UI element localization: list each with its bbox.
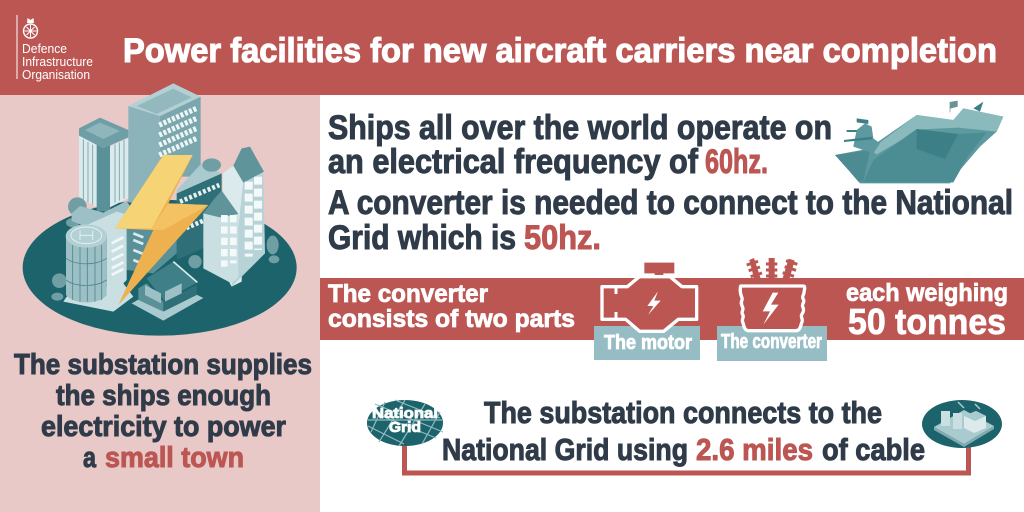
header band [0, 0, 1024, 95]
label box: the motor [594, 326, 700, 360]
building: helipad rotunda [63, 212, 133, 312]
text block: converter needed [328, 184, 1013, 257]
text block: substation connects: The substation connects to the [484, 395, 882, 430]
text block: substation supplies: small town [105, 442, 244, 474]
logo: Defence Infrastructure Organisation [16, 15, 93, 82]
text block: substation supplies: the ships enough [56, 380, 271, 412]
icon: converter [740, 258, 805, 331]
title: Power facilities for new aircraft carriers near completion [123, 32, 997, 70]
trees [51, 197, 279, 301]
band: converter parts [320, 278, 1024, 340]
text block: ships frequency: Ships all over the world operate on [328, 109, 832, 147]
logo: Defence Infrastructure Organisation: Defence [22, 42, 67, 56]
text block: substation connects: National Grid using [442, 432, 688, 467]
cable line [404, 440, 968, 473]
icon: substation [922, 400, 1002, 448]
text block: substation connects: 2.6 miles [696, 432, 813, 467]
text block: each weighing 50 tonnes [846, 279, 1008, 342]
icon: National Grid: Grid [389, 419, 421, 436]
label box: the converter [717, 326, 827, 361]
text block: substation connects: of cable [822, 432, 925, 467]
icon: motor [602, 263, 697, 331]
text block: converter consists of two parts: The converter [328, 280, 488, 308]
label box: the converter: The converter [721, 331, 822, 353]
text block: substation supplies: a [83, 442, 97, 474]
building: middle block [127, 158, 222, 273]
text block: converter needed: 50hz. [524, 219, 601, 257]
text block: substation supplies [14, 349, 312, 474]
building: pavilion [132, 262, 203, 321]
text block: ships frequency: an electrical frequency of [328, 143, 699, 181]
text block: substation supplies: The substation supplies [14, 349, 312, 381]
icon: National Grid: National [372, 405, 438, 422]
text block: substation supplies: electricity to power [41, 411, 286, 443]
illustration: town with lightning bolt [23, 83, 297, 336]
text block: ships frequency: 60hz. [705, 143, 768, 181]
logo: Defence Infrastructure Organisation: Infrastructure [22, 55, 93, 69]
building: tall office [128, 83, 201, 203]
label box: the motor: The motor [604, 332, 692, 354]
building: left tower [72, 118, 133, 231]
text block: each weighing 50 tonnes: each weighing [846, 279, 1008, 307]
text block: each weighing 50 tonnes: 50 tonnes [848, 301, 1006, 342]
text block: substation connects [442, 395, 925, 467]
icon: lightning bolt [115, 155, 208, 305]
building: right apartments [203, 147, 265, 287]
panel: left town panel [0, 95, 320, 512]
text block: converter consists of two parts: consists of two parts [328, 305, 575, 333]
town base ellipse [23, 200, 297, 336]
text block: converter needed: Grid which is [328, 219, 516, 257]
logo: Defence Infrastructure Organisation: Organisation [22, 68, 90, 82]
icon: aircraft carrier [835, 101, 1003, 183]
text block: ships frequency [328, 109, 832, 181]
text block: converter consists of two parts [328, 280, 575, 333]
icon: National Grid [367, 400, 443, 446]
